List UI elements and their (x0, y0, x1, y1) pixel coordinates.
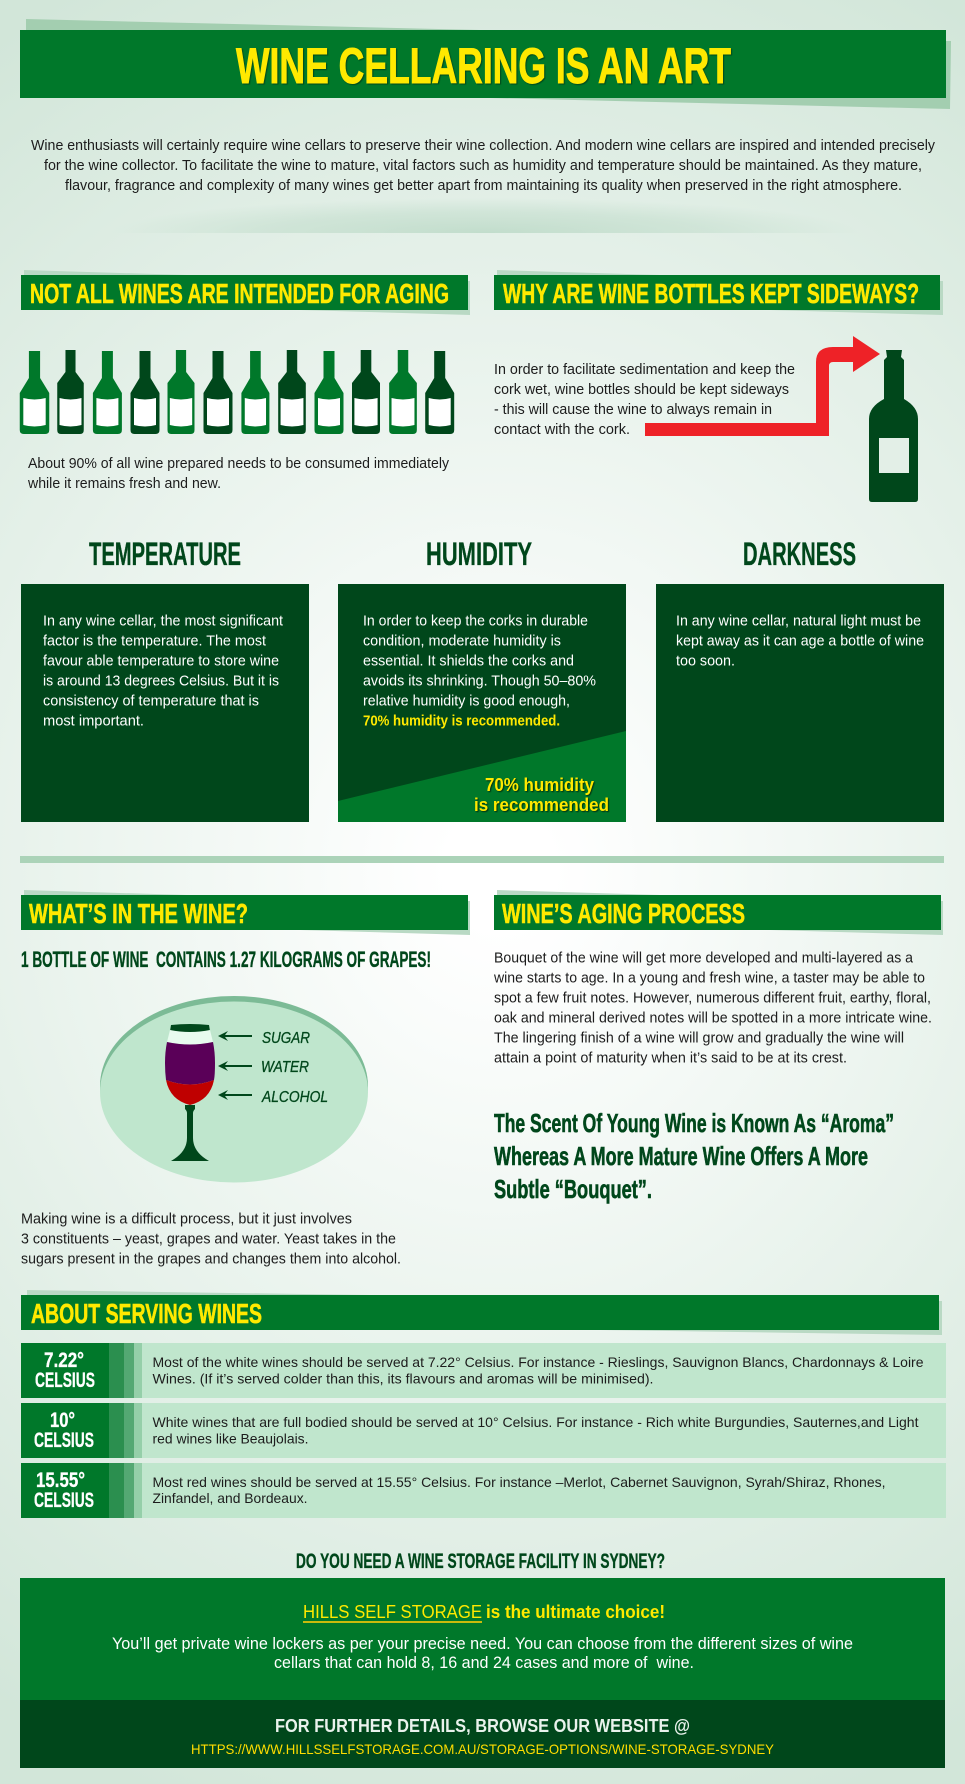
card: humidity: In order to keep the corks in durable (363, 612, 588, 630)
text: sideways explanation: - this will cause the wine to always remain in (494, 401, 772, 418)
heading: temperature: TEMPERATURE (89, 536, 241, 572)
heading: humidity: HUMIDITY (426, 536, 532, 572)
row: 10 degrees (21, 1403, 946, 1458)
card: darkness: In any wine cellar, natural light must be (676, 612, 921, 630)
column: humidity (338, 536, 626, 822)
text: aging description: oak and mineral derived notes will be spotted in a more intricate wine. (494, 1010, 932, 1026)
subheading: grapes per bottle: 1 BOTTLE OF WINE CONTAINS 1.27 KILOGRAMS OF GRAPES! (21, 947, 431, 972)
heading: not all wines (21, 270, 470, 315)
text: 90 percent of wine: About 90% of all wine prepared needs to be consumed immediately (28, 455, 449, 472)
icon: large wine bottle (869, 350, 918, 502)
intro text: flavour, fragrance and complexity of many wines get better apart from maintaining its quality when preserved in the right atmosphere. (65, 177, 902, 194)
panel: what's in the wine (21, 890, 470, 1268)
text: aging description: The lingering finish of a wine will grow and gradually the wine will (494, 1030, 904, 1046)
text: sideways explanation: contact with the cork. (494, 421, 630, 438)
label: alcohol: ALCOHOL (261, 1089, 328, 1106)
row: 10 degrees: CELSIUS (34, 1429, 94, 1452)
heading: what's in the wine (21, 890, 470, 935)
text: sideways explanation: In order to facilitate sedimentation and keep the (494, 361, 795, 378)
panel: not all wines are intended for aging (20, 270, 470, 492)
card: temperature: most important. (43, 712, 144, 730)
callout: 70 percent humidity: 70% humidity (485, 775, 594, 795)
text: private wine lockers (112, 1635, 853, 1672)
card: humidity: 70% humidity is recommended. (363, 712, 560, 730)
heading: wine storage facility question: DO YOU NEED A WINE STORAGE FACILITY IN SYDNEY? (296, 1550, 665, 1573)
heading: darkness: DARKNESS (743, 536, 856, 572)
text: website address: HTTPS://WWW.HILLSSELFSTORAGE.COM.AU/STORAGE-OPTIONS/WINE-STORAGE-SYDNEY (191, 1741, 775, 1757)
panel: hills self storage (20, 1578, 945, 1700)
text: private wine lockers: You’ll get private wine lockers as per your precise need. You can choose from the different sizes of wine (112, 1635, 853, 1653)
heading: about serving wines (21, 1290, 942, 1335)
row: 7.22 degrees: 7.22° (44, 1349, 84, 1372)
card: humidity: condition, moderate humidity is (363, 632, 561, 650)
intro text: Wine enthusiasts will certainly require wine cellars to preserve their wine collection. And modern wine cellars are inspired and intended precisely (31, 137, 935, 154)
text: aging description: wine starts to age. In a young and fresh wine, a taster may be able to (493, 970, 925, 986)
row: 10 degrees: red wines like Beaujolais. (152, 1430, 308, 1446)
callout: aroma and bouquet: Subtle “Bouquet”. (494, 1174, 652, 1204)
row: 7.22 degrees (21, 1343, 946, 1398)
heading: not all wines: NOT ALL WINES ARE INTENDED FOR AGING (30, 278, 449, 309)
callout: aroma and bouquet (494, 1108, 894, 1204)
chart: wine glass composition (100, 996, 368, 1182)
card: temperature (21, 584, 309, 822)
panel: why are wine bottles kept sideways (494, 270, 943, 502)
row: 7.22 degrees: Most of the white wines should be served at 7.22° Celsius. For instance - Rieslings, Sauvignon Blancs, Chardonnays & Loire (152, 1354, 924, 1370)
icon: row of twelve wine bottles (20, 350, 454, 434)
row: 10 degrees: 10° (50, 1409, 75, 1432)
card: temperature: factor is the temperature. The most (43, 632, 267, 650)
row: 15.55 degrees: Zinfandel, and Bordeaux. (152, 1490, 308, 1506)
callout: 70 percent humidity (474, 775, 609, 815)
icon: wine glass (165, 1024, 215, 1161)
text: making wine: 3 constituents – yeast, grapes and water. Yeast takes in the (21, 1230, 396, 1248)
text: ultimate choice: HILLS SELF STORAGE (303, 1602, 482, 1622)
text: private wine lockers: cellars that can hold 8, 16 and 24 cases and more of wine. (274, 1654, 694, 1672)
label: water: WATER (261, 1059, 309, 1076)
card: humidity (338, 584, 626, 822)
card: humidity: essential. It shields the corks and (363, 652, 574, 670)
text: making wine (21, 1210, 401, 1268)
heading: aging process: WINE’S AGING PROCESS (502, 898, 745, 929)
card: temperature: In any wine cellar, the most significant (43, 612, 284, 630)
text: sideways explanation: cork wet, wine bottles should be kept sideways (494, 381, 789, 398)
title: WINE CELLARING IS AN ART (236, 38, 731, 94)
arrow: alcohol (218, 1090, 252, 1100)
intro text: for the wine collector. To facilitate the wine to mature, vital factors such as humidity and temperature should be maintained. As they mature, (44, 157, 922, 174)
card: temperature: consistency of temperature that is (43, 692, 259, 710)
row: 7.22 degrees: CELSIUS (35, 1369, 95, 1392)
intro text (31, 137, 935, 233)
text: making wine: sugars present in the grapes and changes them into alcohol. (21, 1250, 401, 1268)
column: darkness (656, 536, 944, 822)
card: humidity: relative humidity is good enough, (363, 692, 570, 710)
text: making wine: Making wine is a difficult process, but it just involves (21, 1210, 352, 1228)
text: ultimate choice (303, 1602, 665, 1623)
text: sideways explanation (494, 361, 795, 438)
card: darkness: kept away as it can age a bottle of wine (676, 632, 924, 650)
text: aging description: Bouquet of the wine will get more developed and multi-layered as a (494, 950, 914, 966)
heading: why sideways (494, 270, 943, 315)
title banner (20, 19, 951, 109)
row: 15.55 degrees: 15.55° (36, 1469, 85, 1492)
text: aging description: spot a few fruit notes. However, numerous different fruit, earthy, floral, (494, 990, 931, 1006)
arrow: sugar (218, 1031, 252, 1041)
text: further details: FOR FURTHER DETAILS, BROWSE OUR WEBSITE @ (275, 1716, 690, 1736)
row: 15.55 degrees: Most red wines should be served at 15.55° Celsius. For instance –Merlot, Cabernet Sauvignon, Syrah/Shiraz, Rhones, (152, 1474, 886, 1490)
card: temperature: favour able temperature to store wine (43, 652, 279, 670)
text: ultimate choice: is the ultimate choice! (486, 1602, 665, 1622)
text: 90 percent of wine: while it remains fresh and new. (27, 475, 221, 492)
callout: 70 percent humidity: is recommended (474, 795, 609, 815)
arrow: red arrow to cork (645, 336, 880, 436)
heading: aging process (494, 890, 943, 935)
heading: what's in the wine: WHAT’S IN THE WINE? (29, 898, 248, 929)
card: temperature: is around 13 degrees Celsius. But it is (43, 672, 279, 690)
arrow: water (218, 1061, 252, 1071)
text: aging description: attain a point of maturity when it’s said to be at its crest. (494, 1050, 847, 1066)
panel: website footer (20, 1700, 945, 1768)
panel: wine's aging process (493, 890, 943, 1204)
text: aging description (493, 950, 932, 1066)
card: darkness: too soon. (676, 652, 735, 670)
label: sugar: SUGAR (262, 1030, 310, 1047)
heading: about serving wines: ABOUT SERVING WINES (31, 1298, 262, 1329)
row: 15.55 degrees (21, 1463, 946, 1518)
text: 90 percent of wine (27, 455, 449, 492)
row: 7.22 degrees: Wines. (If it’s served colder than this, its flavours and aromas will be minimised). (152, 1370, 654, 1386)
card: humidity: avoids its shrinking. Though 50–80% (363, 672, 596, 690)
card: darkness (656, 584, 944, 822)
panel: about serving wines (21, 1290, 946, 1518)
column: temperature (21, 536, 309, 822)
row: 15.55 degrees: CELSIUS (34, 1489, 94, 1512)
row: 10 degrees: White wines that are full bodied should be served at 10° Celsius. For instance - Rich white Burgundies, Sauternes,and Light (152, 1414, 919, 1430)
